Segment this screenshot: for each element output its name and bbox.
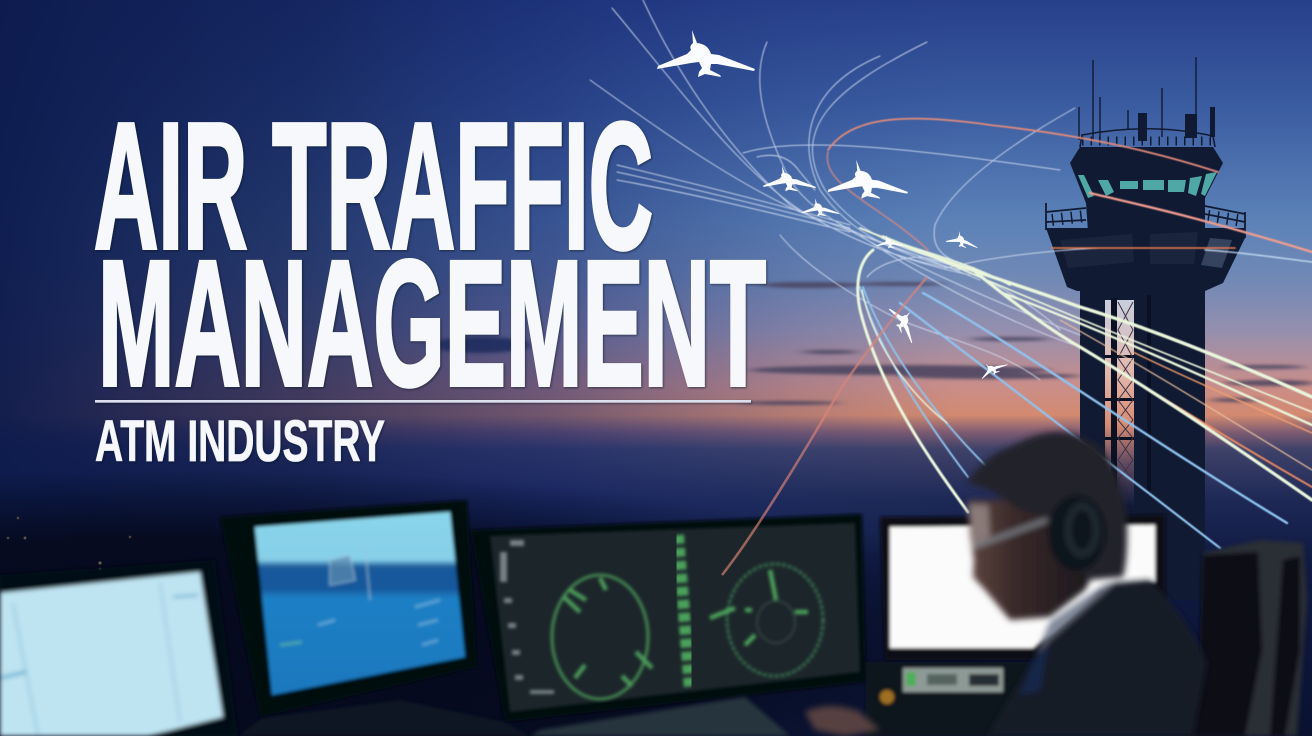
bright trails: [858, 228, 1312, 512]
operator hair: [967, 432, 1127, 580]
operator glasses: [973, 520, 1047, 547]
flight trails: [590, 0, 1312, 548]
radar scope right: [710, 564, 823, 676]
title: [94, 86, 766, 474]
keyboard panel: [530, 697, 790, 736]
city lights: [7, 517, 131, 570]
operator face: [968, 500, 1100, 620]
airliner: top large: [657, 30, 755, 77]
operator: [805, 432, 1207, 736]
tower upper cab: [1070, 147, 1223, 232]
monitor: white screen: [880, 515, 1165, 660]
desk: [238, 700, 530, 736]
blue trails: [860, 287, 1287, 548]
subtitle: ATM INDUSTRY: [95, 409, 385, 474]
radar centre strip: [678, 535, 690, 690]
airliner: tiny: [877, 235, 904, 248]
tower lower cab: [1046, 228, 1245, 291]
monitor: ocean view: [220, 500, 477, 717]
airliner: descending: [886, 300, 926, 345]
red trails: [827, 119, 1312, 487]
airliner: small: [802, 198, 839, 216]
headset: [1048, 495, 1106, 571]
title: AIR TRAFFIC: [94, 86, 653, 287]
radar readouts: [500, 540, 554, 694]
radar scope left: [552, 575, 652, 699]
control tower: [1046, 57, 1245, 600]
airliner: centre right: [828, 160, 908, 199]
console unit: [866, 662, 1030, 736]
airliner: lower right: [976, 354, 1009, 381]
airliner: right small: [945, 229, 980, 250]
tower railings and antennas: [1046, 57, 1245, 238]
chair: [1180, 540, 1307, 736]
operator hand: [805, 706, 880, 736]
airliners: [657, 30, 1009, 381]
thin trails: [590, 0, 1312, 380]
airliner: centre left: [763, 166, 816, 191]
monitor: radar: [470, 514, 866, 722]
title divider: [95, 400, 751, 403]
tower lattice: [1105, 298, 1134, 508]
monitor: left: [0, 560, 238, 736]
operator body: [987, 580, 1207, 736]
red trail over monitor: [722, 277, 927, 575]
control room foreground: [0, 277, 1307, 736]
